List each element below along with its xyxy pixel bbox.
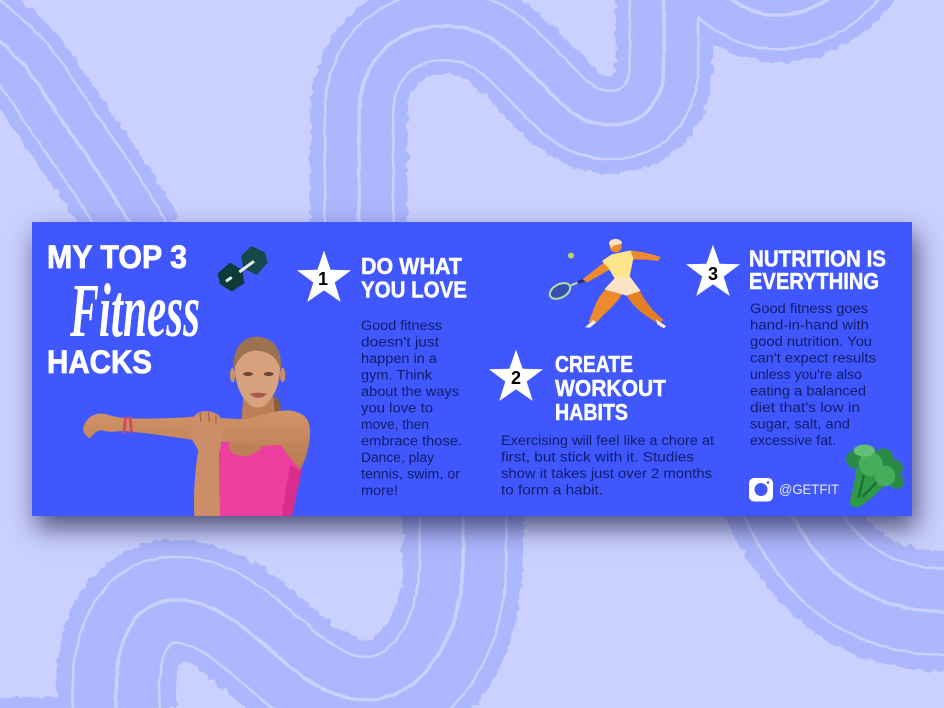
step 1: body text: tennis, swim, or xyxy=(361,466,461,482)
step 3: body text xyxy=(750,301,876,448)
title: MY TOP 3 xyxy=(47,239,187,275)
step 3: star badge: 3 xyxy=(708,264,718,284)
step 1: body text: Dance, play xyxy=(361,450,434,465)
neck and chest xyxy=(227,397,297,463)
bracelets xyxy=(124,417,132,433)
step 2: heading: WORKOUT xyxy=(555,375,666,401)
step 3: body text: good nutrition. You xyxy=(750,334,872,349)
step 2: body text: first, but stick with it. Studies xyxy=(501,450,694,464)
step 1: body text xyxy=(361,318,462,498)
step 3: heading xyxy=(749,246,886,294)
step 1: body text: Good fitness xyxy=(361,318,442,333)
step 1: body text: more! xyxy=(361,483,398,498)
step 2: heading: HABITS xyxy=(555,399,628,425)
forearm and hand xyxy=(190,411,222,517)
title: Fitness xyxy=(69,269,200,353)
panel: blue banner xyxy=(32,222,912,516)
head xyxy=(235,348,280,407)
icon: tennis player xyxy=(547,239,666,328)
icon: instagram xyxy=(749,478,773,502)
social handle: @GETFIT xyxy=(779,481,839,497)
photo: woman stretching xyxy=(83,337,310,517)
step 1: body text: happen in a xyxy=(361,351,438,366)
step 1: body text: doesn't just xyxy=(361,334,439,350)
step 1: body text: gym. Think xyxy=(361,368,432,382)
step 1: heading: DO WHAT xyxy=(361,253,462,279)
step 3: body text: sugar, salt, and xyxy=(750,416,850,432)
icon: dumbbell xyxy=(218,246,268,292)
step 3: star badge xyxy=(686,244,740,296)
step 2: body text: show it takes just over 2 months xyxy=(501,466,712,481)
step 1: heading xyxy=(361,253,467,302)
pink tank top xyxy=(220,442,302,517)
hair xyxy=(234,337,281,371)
step 2: heading xyxy=(555,351,666,425)
step 2: body text xyxy=(501,433,714,498)
step 2: star badge xyxy=(489,350,543,401)
step 3: heading: NUTRITION IS xyxy=(749,246,886,272)
step 3: body text: hand-in-hand with xyxy=(750,318,869,332)
step 3: body text: eating a balanced xyxy=(750,384,866,398)
step 1: body text: about the ways xyxy=(361,384,459,399)
face details xyxy=(243,372,274,398)
ponytail xyxy=(274,395,281,412)
step 2: star badge: 2 xyxy=(511,368,521,388)
step 1: body text: you love to xyxy=(361,400,433,416)
step 3: heading: EVERYTHING xyxy=(749,268,879,294)
step 2: body text: to form a habit. xyxy=(501,482,603,498)
step 3: body text: Good fitness goes xyxy=(750,301,868,316)
step 1: body text: embrace those. xyxy=(361,434,462,448)
step 3: body text: can't expect results xyxy=(750,350,876,366)
step 1: heading: YOU LOVE xyxy=(361,276,467,302)
title xyxy=(47,239,200,380)
icon: broccoli xyxy=(846,445,904,508)
step 1: star badge: 1 xyxy=(318,269,328,289)
arm xyxy=(83,410,310,471)
title: HACKS xyxy=(47,344,152,380)
banner content xyxy=(48,239,904,516)
step 1: body text: move, then xyxy=(361,417,429,432)
step 3: body text: excessive fat. xyxy=(750,433,836,448)
step 1: star badge xyxy=(297,250,351,302)
step 2: heading: CREATE xyxy=(555,351,633,377)
step 2: body text: Exercising will feel like a chore at xyxy=(501,433,714,448)
step 3: body text: diet that's low in xyxy=(750,400,860,415)
step 3: body text: unless you're also xyxy=(750,367,862,382)
